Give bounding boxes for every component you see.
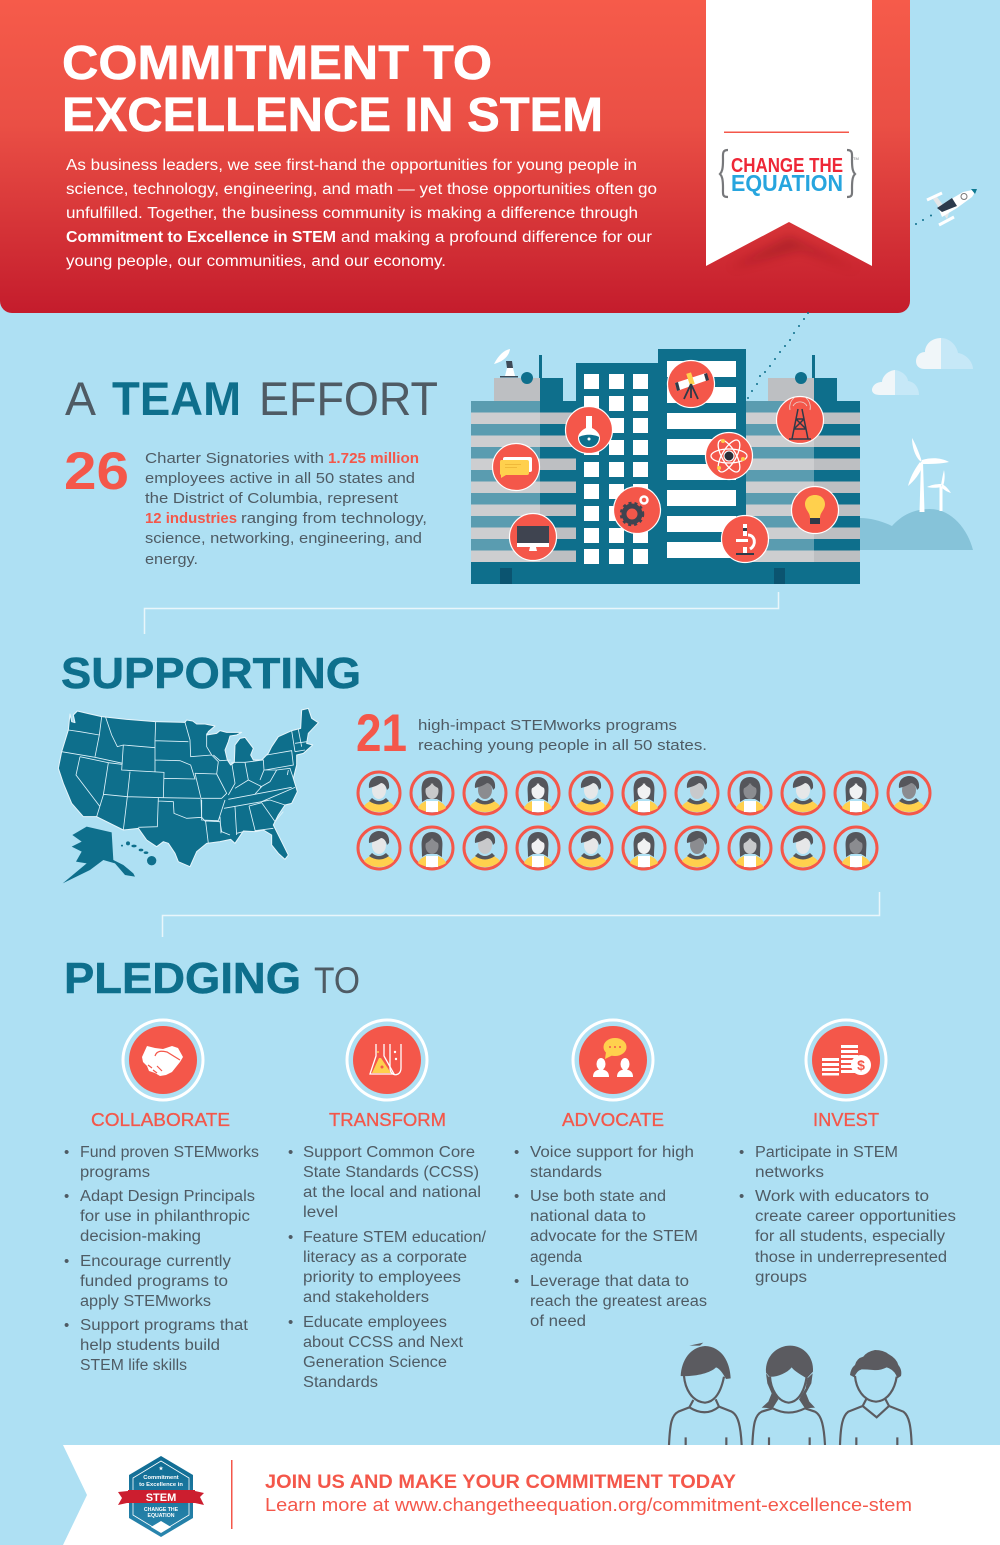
bullet list: for all students, especially [755,1228,945,1245]
intro paragraph: As business leaders, we see first-hand the opportunities for young people in [66,157,637,174]
stat: 26 signatories: 26 [64,442,129,501]
column: invest [739,1020,956,1286]
heading: Pledging to: TO [314,960,360,1001]
intro paragraph: science, technology, engineering, and math — yet those opportunities often go [66,181,657,198]
bullet list: Participate in STEM [755,1144,898,1161]
badge: Commitment to Excellence in STEM: EQUATION [148,1513,175,1519]
people silhouettes [669,1343,912,1445]
programs description: high-impact STEMworks programs [418,717,677,734]
middle building [576,363,658,584]
person 3 [840,1350,912,1445]
bullet list: Generation Science [303,1354,447,1371]
icon: chat bubbles [492,444,540,490]
team effort paragraph: Charter Signatories with [145,450,324,467]
heading: A Team Effort: A [65,372,97,425]
intro paragraph: and making a profound difference for our [341,229,652,246]
bullet list: Use both state and [530,1188,666,1205]
bullet list: Educate employees [303,1314,447,1331]
column: advocate [514,1020,707,1330]
logo: Change the Equation [720,150,859,197]
icon: rocket with trail [915,189,977,225]
bullet list: • [739,1144,744,1161]
bullet list: networks [755,1164,824,1181]
icon: gears [614,486,660,534]
heading: COLLABORATE [91,1110,230,1130]
logo: Change the Equation: TM [853,156,859,161]
intro paragraph: Commitment to Excellence in STEM [66,229,336,246]
icon: handshake [123,1020,203,1100]
heading: TRANSFORM [329,1110,446,1130]
icon: computer monitor [510,514,556,560]
bullet list: • [64,1144,69,1161]
badge: Commitment to Excellence in STEM: CHANGE THE [144,1507,179,1513]
person 2 [752,1346,825,1445]
bullet list: for use in philanthropic [80,1208,250,1225]
icon: flask [566,406,612,454]
intro paragraph: young people, our communities, and our economy. [66,253,446,270]
bullet list: • [64,1317,69,1334]
badge: Commitment to Excellence in STEM: ★ [159,1466,164,1472]
intro paragraph [66,157,657,270]
programs description [418,717,707,754]
bullet list: programs [80,1164,150,1181]
bullet list: • [64,1188,69,1205]
bullet list: Feature STEM education/ [303,1229,487,1246]
bullet list: • [514,1144,519,1161]
bullet list: create career opportunities [755,1208,956,1225]
heading: INVEST [813,1110,879,1130]
map of the United States [58,708,318,883]
badge: Commitment to Excellence in STEM: Commitment [143,1475,179,1481]
icon: microscope [722,516,768,562]
bullet list: decision-making [80,1228,201,1245]
ribbon shadow [744,234,832,264]
bullet list: funded programs to [80,1273,228,1290]
ribbon with logo [706,0,872,266]
right building [746,355,860,584]
heading: A Team Effort: TEAM [112,372,241,425]
call to action [265,1472,912,1515]
bullet list: reach the greatest areas [530,1293,707,1310]
badge: Commitment to Excellence in STEM [118,1456,204,1537]
logo: Change the Equation: EQUATION [731,170,843,196]
column: collaborate [64,1020,259,1374]
bullet list: • [64,1253,69,1270]
hills and wind turbines [860,438,973,550]
bullet list: Leverage that data to [530,1273,689,1290]
person 1 [669,1343,742,1445]
icon: satellite dish [494,349,518,378]
icon: beakers [347,1020,427,1100]
team effort paragraph: 12 industries [145,510,237,527]
bullet list: at the local and national [303,1184,481,1201]
icon: telescope [668,360,714,408]
icon: coins [806,1020,886,1100]
bullet list: Support Common Core [303,1144,475,1161]
bullet list [739,1144,956,1286]
dotted rocket path [747,312,809,399]
title: COMMITMENT TO [62,37,492,90]
bullet list: apply STEMworks [80,1293,211,1310]
bullet list: level [303,1204,338,1221]
bullet list: groups [755,1269,807,1286]
header panel [0,0,910,313]
bullet list: and stakeholders [303,1289,429,1306]
clouds [872,338,973,395]
left building [471,355,576,584]
bullet list: those in underrepresented [755,1249,947,1266]
bullet list: • [288,1314,293,1331]
bullet list: • [514,1188,519,1205]
heading: A Team Effort: EFFORT [259,372,438,425]
bullet list: help students build [80,1337,220,1354]
team effort paragraph: employees active in all 50 states and [145,470,415,487]
bullet list: Work with educators to [755,1188,929,1205]
bullet list: State Standards (CCSS) [303,1164,479,1181]
bullet list [514,1144,707,1330]
heading: A Team Effort [65,372,438,425]
team effort paragraph [145,450,427,568]
bullet list: • [288,1144,293,1161]
icon: coins: $ [857,1057,865,1073]
bullet list: priority to employees [303,1269,461,1286]
team effort paragraph: ranging from technology, [241,510,427,527]
footer banner [63,1445,1000,1545]
programs description: reaching young people in all 50 states. [418,737,707,754]
icon: light bulb [792,486,838,534]
building illustration [471,349,860,584]
bullet list [288,1144,487,1391]
bullet list: • [514,1273,519,1290]
bullet list: standards [530,1164,602,1181]
heading: ADVOCATE [562,1110,664,1130]
heading: Pledging to: PLEDGING [64,954,301,1003]
avatars: students grid [358,772,930,869]
team effort paragraph: science, networking, engineering, and [145,530,422,547]
bullet list [64,1144,259,1374]
title [62,37,603,142]
bullet list: about CCSS and Next [303,1334,464,1351]
tall building [658,349,746,584]
bullet list: • [739,1188,744,1205]
bullet list: of need [530,1313,586,1330]
title: EXCELLENCE IN STEM [62,89,603,142]
team effort paragraph: 1.725 million [328,450,419,467]
bullet list: Standards [303,1374,378,1391]
team effort paragraph: the District of Columbia, represent [145,490,399,507]
call to action: Learn more at www.changetheequation.org/commitment-excellence-stem [265,1495,912,1515]
bullet list: advocate for the STEM [530,1228,698,1245]
column: transform [288,1020,487,1391]
call to action: JOIN US AND MAKE YOUR COMMITMENT TODAY [265,1472,736,1493]
bullet list: Encourage currently [80,1253,231,1270]
badge: Commitment to Excellence in STEM: to Excellence in [139,1482,183,1488]
stat: 21 programs: 21 [356,704,407,763]
icon: radio tower [776,396,824,444]
bullet list: Voice support for high [530,1144,694,1161]
icon: speech bubble and people [573,1020,653,1100]
bullet list: • [288,1229,293,1246]
heading: Supporting: SUPPORTING [61,649,361,698]
badge: Commitment to Excellence in STEM: STEM [146,1492,176,1504]
bullet list: STEM life skills [80,1357,187,1374]
icon: atom [706,432,752,480]
bullet list: Fund proven STEMworks [80,1144,259,1161]
bullet list: Support programs that [80,1317,249,1334]
team effort paragraph: energy. [145,551,198,568]
logo: Change the Equation: CHANGE THE [731,155,843,177]
bullet list: agenda [530,1249,582,1266]
bullet list: national data to [530,1208,646,1225]
intro paragraph: unfulfilled. Together, the business community is making a difference through [66,205,638,222]
bullet list: Adapt Design Principals [80,1188,255,1205]
bullet list: literacy as a corporate [303,1249,467,1266]
